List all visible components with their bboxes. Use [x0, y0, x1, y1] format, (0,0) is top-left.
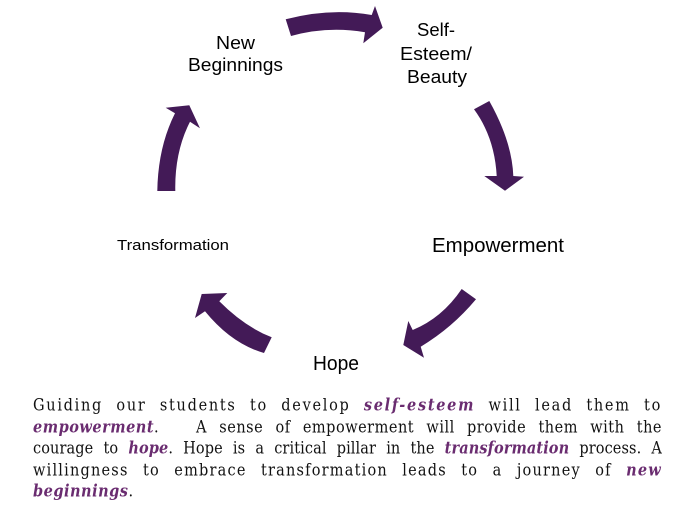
arrow: empowerment to hope	[403, 289, 476, 358]
arrow: self-esteem to empowerment	[474, 101, 524, 191]
label: transformation: Transformation	[117, 237, 229, 254]
description paragraph: courage to hope. Hope is a critical pillar in the transformation process. A	[33, 439, 662, 458]
label: hope: Hope	[313, 353, 359, 375]
description paragraph: willingness to embrace transformation leads to a journey of new	[33, 460, 662, 480]
label: empowerment: Empowerment	[432, 235, 564, 257]
description paragraph: Guiding our students to develop self-esteem will lead them to	[33, 396, 662, 415]
description paragraph	[33, 396, 662, 501]
description paragraph: empowerment. A sense of empowerment will provide them with the	[33, 417, 662, 437]
cycle diagram	[117, 6, 564, 375]
label: new beginnings	[188, 33, 283, 75]
description paragraph: beginnings.	[33, 482, 134, 501]
label: self-esteem / beauty: Esteem/	[400, 44, 472, 64]
label: self-esteem / beauty	[400, 20, 472, 87]
arrow: transformation to new beginnings	[157, 105, 200, 191]
label: self-esteem / beauty: Beauty	[407, 67, 467, 87]
arrow: hope to transformation	[195, 293, 272, 353]
label: new beginnings: Beginnings	[188, 55, 283, 75]
label: new beginnings: New	[216, 33, 256, 53]
arrow: new beginnings to self-esteem	[286, 6, 383, 43]
label: self-esteem / beauty: Self-	[417, 20, 455, 40]
